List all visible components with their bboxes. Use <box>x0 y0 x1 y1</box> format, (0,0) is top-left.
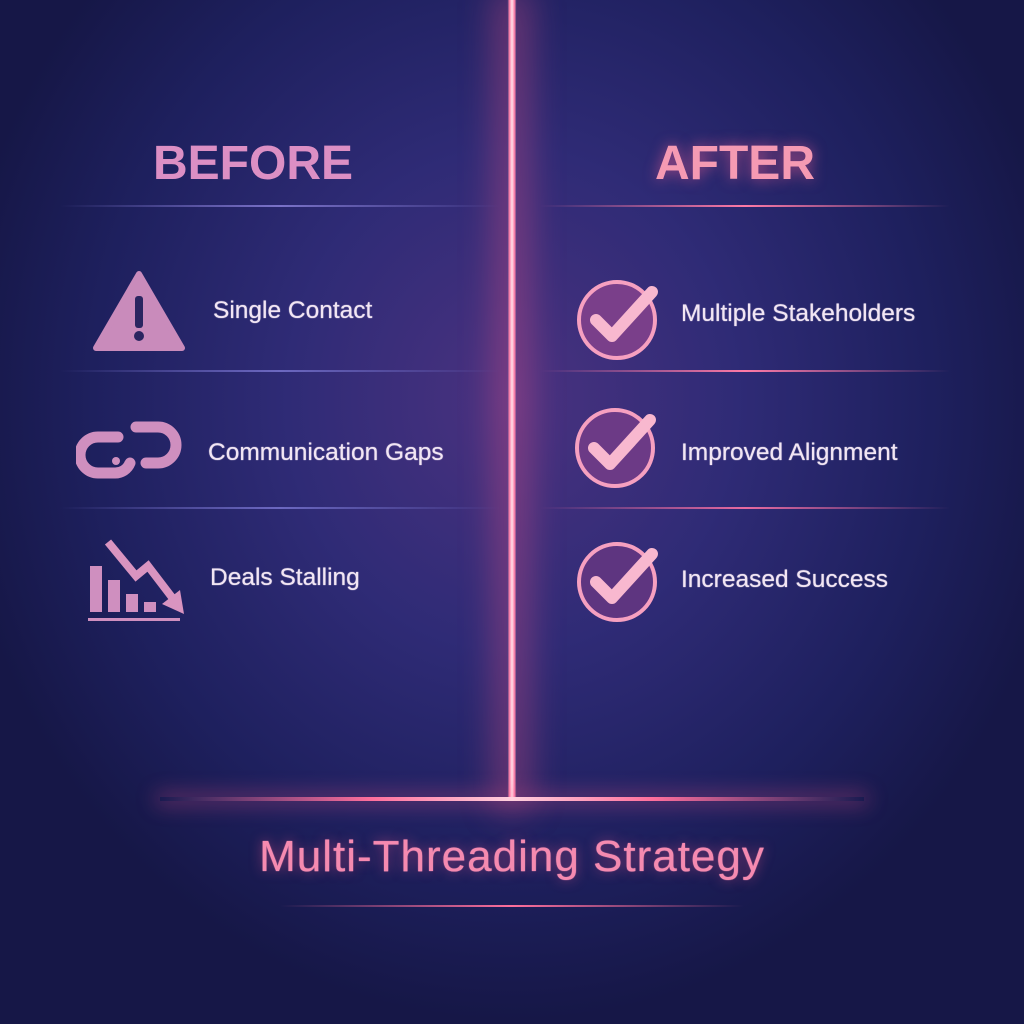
title: Multi-Threading Strategy: Multi-Threading Strategy <box>259 832 765 881</box>
icon: check 2 <box>575 408 656 488</box>
text: Deals Stalling: Deals Stalling <box>210 564 360 591</box>
icon: check 3 <box>577 542 658 622</box>
icon: broken link <box>76 422 182 478</box>
horizontal glowing base line <box>160 797 864 801</box>
icon: warning triangle <box>93 271 185 351</box>
heading: BEFORE: BEFORE <box>153 137 353 190</box>
text: Multiple Stakeholders: Multiple Stakeholders <box>681 300 915 327</box>
icon: check 1 <box>577 280 658 360</box>
text: Improved Alignment: Improved Alignment <box>681 439 898 466</box>
vertical glowing divider <box>507 0 517 800</box>
text: Communication Gaps: Communication Gaps <box>208 439 444 466</box>
heading: AFTER: AFTER <box>655 137 815 190</box>
icon: declining chart <box>88 540 184 621</box>
text: Single Contact: Single Contact <box>213 297 372 324</box>
text: Increased Success: Increased Success <box>681 566 888 593</box>
